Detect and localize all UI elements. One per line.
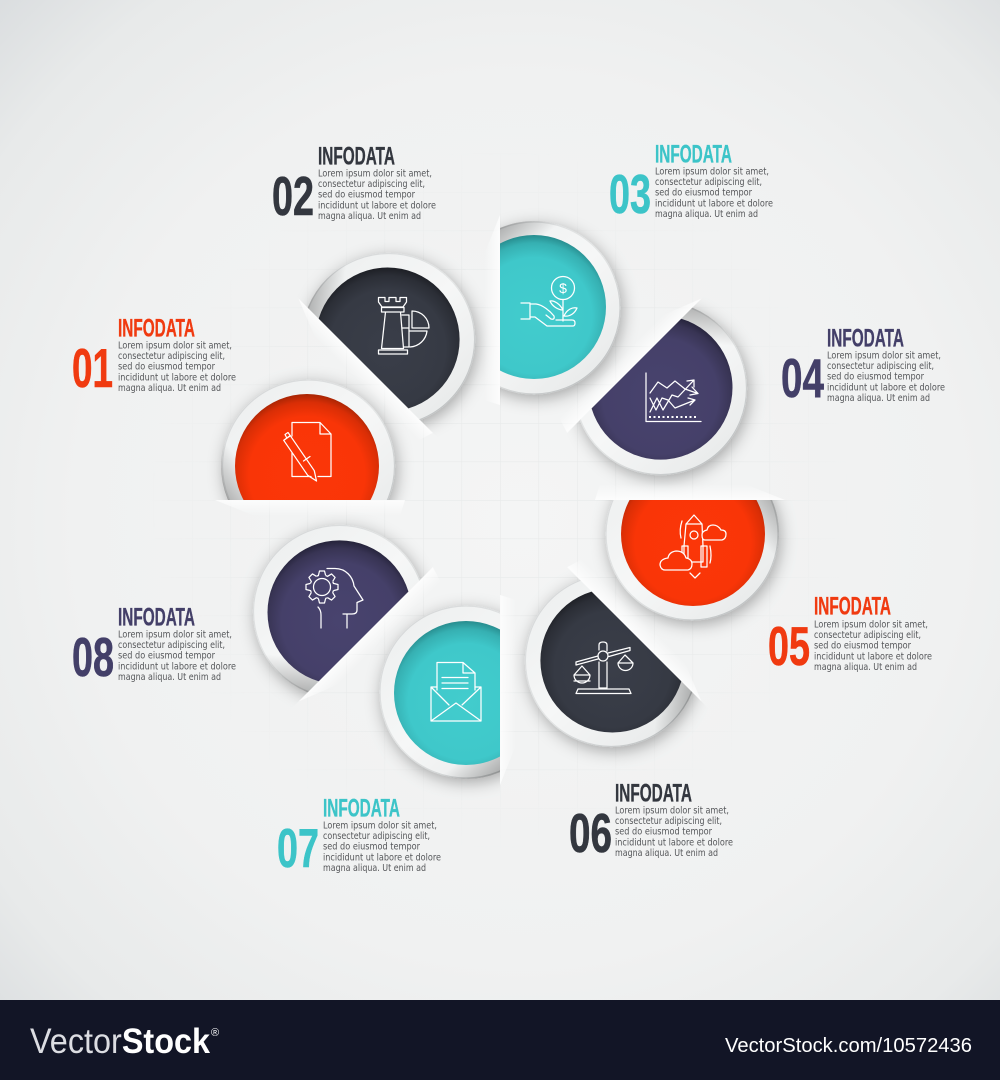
- icon: document and pen: [284, 422, 331, 481]
- segment 01 disc: [214, 374, 406, 500]
- body 01: sed do eiusmod tempor: [118, 362, 216, 372]
- icon: rocket and clouds: [660, 515, 726, 578]
- body 03: sed do eiusmod tempor: [655, 188, 753, 198]
- heading 07: INFODATA: [323, 794, 400, 822]
- number 08: 08: [72, 627, 114, 688]
- body 03: Lorem ipsum dolor sit amet,: [655, 166, 769, 178]
- body 05: consectetur adipiscing elit,: [814, 630, 921, 641]
- segment 03 disc: [500, 216, 632, 408]
- body 08: incididunt ut labore et dolore: [118, 662, 236, 672]
- body 06: Lorem ipsum dolor sit amet,: [615, 806, 729, 816]
- body 05: Lorem ipsum dolor sit amet,: [814, 620, 928, 630]
- body 01: incididunt ut labore et dolore: [118, 372, 236, 384]
- body 08: consectetur adipiscing elit,: [118, 640, 225, 651]
- segment 01 flap: [215, 500, 405, 516]
- heading 04: INFODATA: [827, 324, 904, 352]
- segment 05 disc: [598, 500, 790, 634]
- label 03: [609, 140, 773, 225]
- segment 01: red circle with document and pen: [214, 374, 406, 508]
- body 03: incididunt ut labore et dolore: [655, 198, 773, 210]
- segment 02 disc: [304, 248, 486, 430]
- segment 06: dark circle with balance scale: [518, 566, 702, 760]
- number 02: 02: [272, 166, 314, 227]
- segment 07 disc: [372, 600, 500, 792]
- body 02: sed do eiusmod tempor: [318, 190, 416, 200]
- segment 04: purple circle with line chart: [564, 299, 758, 488]
- heading 06: INFODATA: [615, 780, 692, 808]
- number 04: 04: [781, 348, 824, 409]
- body 07: incididunt ut labore et dolore: [323, 852, 441, 864]
- body 08: [118, 630, 236, 683]
- body 08: Lorem ipsum dolor sit amet,: [118, 630, 232, 640]
- footer registered mark: ®: [211, 1027, 219, 1039]
- body 04: [827, 350, 945, 404]
- body 08: magna aliqua. Ut enim ad: [118, 672, 221, 683]
- body 06: consectetur adipiscing elit,: [615, 816, 722, 827]
- segment 05 flap: [595, 484, 785, 500]
- segment 04 flap: [556, 287, 702, 433]
- body 03: [655, 166, 773, 220]
- body 04: Lorem ipsum dolor sit amet,: [827, 350, 941, 362]
- body 03: magna aliqua. Ut enim ad: [655, 209, 758, 220]
- segment 03: teal circle with hand and money plant: [490, 216, 632, 408]
- segment 08: purple circle with head and gear: [246, 520, 435, 701]
- segment 07: teal circle with envelope: [372, 595, 508, 792]
- body 02: consectetur adipiscing elit,: [318, 179, 425, 190]
- segment 08 disc: [246, 520, 428, 701]
- segment 02: dark circle with rook and pie chart: [299, 248, 486, 435]
- number 01: 01: [72, 338, 113, 399]
- body 02: magna aliqua. Ut enim ad: [318, 211, 421, 222]
- label 06: [569, 780, 733, 864]
- body 02: Lorem ipsum dolor sit amet,: [318, 168, 432, 180]
- body 05: magna aliqua. Ut enim ad: [814, 662, 917, 673]
- body 03: consectetur adipiscing elit,: [655, 177, 762, 188]
- body 01: [118, 340, 236, 394]
- body 04: magna aliqua. Ut enim ad: [827, 393, 930, 404]
- heading 03: INFODATA: [655, 140, 732, 168]
- body 07: Lorem ipsum dolor sit amet,: [323, 820, 437, 832]
- body 07: magna aliqua. Ut enim ad: [323, 863, 426, 874]
- icon: head with gear: [306, 568, 363, 628]
- body 06: [615, 806, 733, 859]
- body 02: incididunt ut labore et dolore: [318, 200, 436, 212]
- segment 03 flap: [484, 215, 500, 405]
- label 08: [72, 604, 236, 688]
- label 01: [72, 314, 236, 399]
- label 05: [768, 592, 932, 677]
- body 05: sed do eiusmod tempor: [814, 640, 912, 652]
- body 07: sed do eiusmod tempor: [323, 842, 421, 852]
- number 05: 05: [768, 616, 810, 677]
- body 01: Lorem ipsum dolor sit amet,: [118, 340, 232, 352]
- footer image id: VectorStock.com/10572436: [725, 1034, 972, 1057]
- body 01: consectetur adipiscing elit,: [118, 351, 225, 362]
- label 07: [277, 794, 441, 879]
- heading 02: INFODATA: [318, 142, 395, 170]
- segment 05: red circle with rocket and clouds: [596, 490, 790, 634]
- body 02: [318, 168, 436, 222]
- icon: balance scale: [574, 642, 633, 694]
- number 06: 06: [569, 803, 612, 864]
- segment 04 disc: [573, 303, 758, 488]
- segment 06 disc: [518, 576, 702, 760]
- body 06: incididunt ut labore et dolore: [615, 838, 733, 848]
- body 08: sed do eiusmod tempor: [118, 650, 216, 662]
- segment 02 flap: [287, 298, 433, 444]
- icon: line chart with arrows: [646, 373, 701, 422]
- body 07: consectetur adipiscing elit,: [323, 831, 430, 842]
- heading 01: INFODATA: [118, 314, 195, 342]
- heading 05: INFODATA: [814, 592, 891, 620]
- body 04: sed do eiusmod tempor: [827, 372, 925, 382]
- icon: hand with money plant: $: [559, 280, 567, 296]
- heading 08: INFODATA: [118, 604, 195, 632]
- icon: rook and pie chart: [378, 298, 429, 354]
- body 04: consectetur adipiscing elit,: [827, 361, 934, 372]
- segment 06 flap: [567, 556, 713, 702]
- segment 08 flap: [298, 567, 444, 713]
- body 06: sed do eiusmod tempor: [615, 826, 713, 838]
- body 05: incididunt ut labore et dolore: [814, 652, 932, 662]
- label 02: [272, 142, 436, 227]
- icon: open envelope with letter: [431, 662, 481, 721]
- body 05: [814, 620, 932, 673]
- label 04: [781, 324, 945, 409]
- body 01: magna aliqua. Ut enim ad: [118, 383, 221, 394]
- body 06: magna aliqua. Ut enim ad: [615, 848, 718, 859]
- body 04: incididunt ut labore et dolore: [827, 382, 945, 394]
- number 07: 07: [277, 818, 319, 879]
- footer logo: VectorStock: [30, 1022, 210, 1061]
- footer bar: [0, 1000, 1000, 1080]
- body 07: [323, 820, 441, 874]
- number 03: 03: [609, 164, 651, 225]
- icon: hand with money plant: [521, 276, 577, 326]
- segment 07 flap: [500, 595, 516, 785]
